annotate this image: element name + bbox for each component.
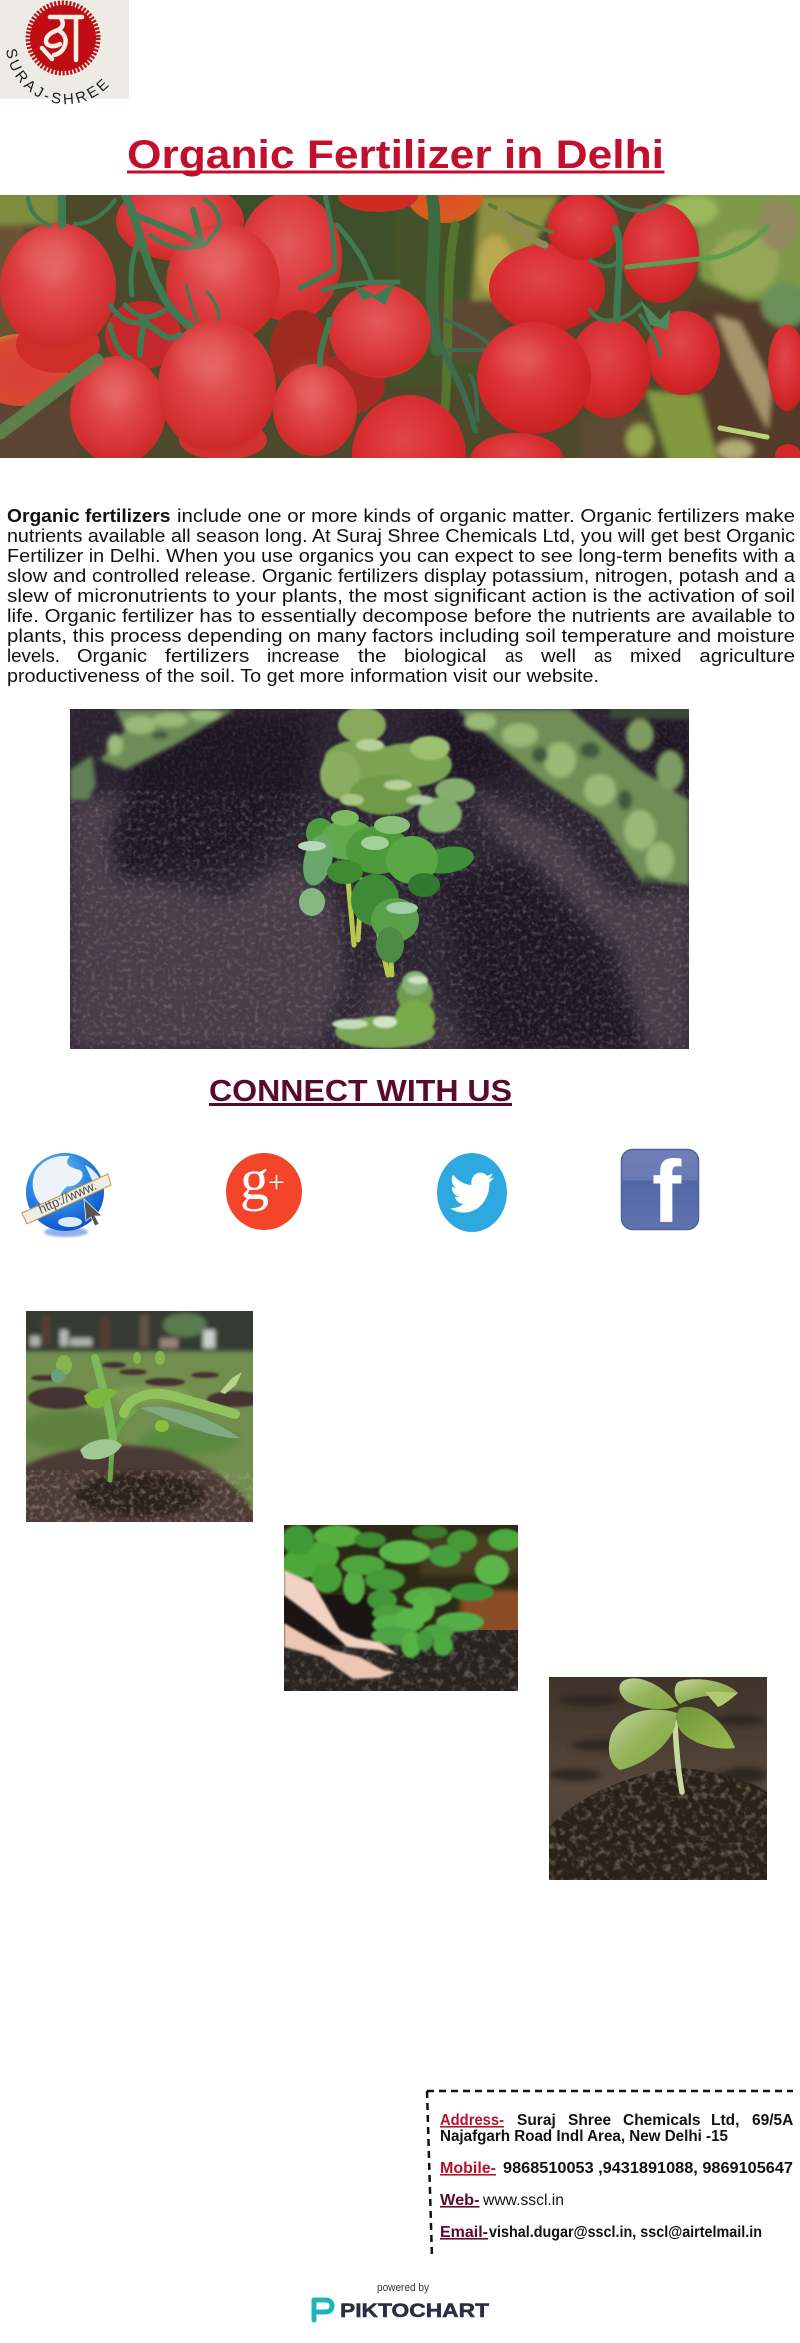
front tomatoes left group: [0, 223, 466, 458]
background rows: [70, 705, 695, 885]
intro paragraph: fertilizers: [165, 646, 250, 666]
photo: hands planting in soil: [277, 1525, 528, 1691]
intro paragraph: include one or more kinds of organic matter. Organic fertilizers make: [177, 506, 795, 526]
icon: google plus: +: [268, 1166, 285, 1199]
arms: [284, 1570, 398, 1679]
back seedlings: [51, 1351, 242, 1394]
icon: website globe: [22, 1153, 111, 1237]
intro paragraph: life. Organic fertilizer has to essentially decompose before the nutrients are available to: [7, 606, 795, 626]
icon: facebook: f: [652, 1142, 682, 1241]
highlights: [20, 230, 546, 407]
trees: [26, 1311, 253, 1354]
photo: seedling in soil mound: [549, 1677, 767, 1880]
banana plant: [95, 1358, 235, 1480]
icon: google plus: g: [240, 1147, 269, 1212]
intro paragraph: nutrients available all season long. At Suraj Shree Chemicals Ltd, you will get best Organic: [7, 526, 795, 546]
back plant in centre row: [320, 707, 475, 833]
mobile: 9868510053 ,9431891088, 9869105647: [503, 2160, 793, 2177]
grass: [20, 1385, 240, 1454]
intro paragraph: Organic: [77, 646, 147, 666]
email: Email-: [440, 2224, 488, 2241]
leaves: [277, 1525, 522, 1658]
heading: connect with us: CONNECT WITH US: [209, 1073, 512, 1108]
intro paragraph: biological: [404, 646, 486, 666]
intro paragraph: [7, 506, 796, 686]
intro paragraph: agriculture: [699, 646, 795, 666]
intro paragraph: plants, this process depending on many factors including soil temperature and moisture: [7, 626, 795, 646]
contact box dashed border: [427, 2091, 793, 2258]
mulch mounds: [28, 1362, 263, 1409]
intro paragraph: Organic fertilizers: [7, 506, 170, 526]
intro paragraph: as: [505, 646, 523, 666]
contact details: [440, 2112, 793, 2241]
icon: facebook: [622, 1142, 698, 1241]
address: Ltd,: [711, 2112, 739, 2129]
logo: Suraj Shree: [0, 0, 129, 104]
address: 69/5A: [752, 2112, 793, 2129]
footer: powered by piktochart: PIKTOCHART: [340, 2300, 489, 2322]
intro paragraph: slew of micronutrients to your plants, the most significant action is the activation of soil: [7, 586, 795, 606]
intro paragraph: well: [540, 646, 576, 666]
address: Shree: [568, 2112, 611, 2129]
web: Web-: [440, 2192, 480, 2209]
address: Address-: [440, 2112, 504, 2129]
icon: google plus: [226, 1147, 302, 1230]
intro paragraph: increase: [267, 646, 340, 666]
seedling: [609, 1678, 738, 1792]
intro paragraph: the: [358, 646, 387, 666]
footer: powered by piktochart: powered by: [377, 2282, 429, 2294]
tomatoes behind: [0, 195, 800, 458]
footer: powered by piktochart: [314, 2282, 489, 2322]
photo: young banana plant on mulch: [26, 1311, 253, 1522]
intro paragraph: mixed: [630, 646, 682, 666]
photo: ripe tomatoes on the vine: [0, 195, 800, 458]
intro paragraph: as: [594, 646, 612, 666]
icon: twitter: [437, 1153, 507, 1232]
logo: Suraj Shree: SURAJ-SHREE: [6, 49, 109, 104]
web: [440, 2192, 564, 2209]
sunlit soil: [70, 790, 689, 1049]
right front tomatoes: [470, 311, 720, 458]
mobile: Mobile-: [440, 2160, 496, 2177]
photo: rows of seedlings in dark soil: [70, 705, 695, 1049]
central plant: [298, 810, 476, 1048]
intro paragraph: productiveness of the soil. To get more information visit our website.: [7, 666, 599, 686]
stems behind: [430, 195, 552, 430]
icon: website globe: http://www.: [36, 1178, 99, 1217]
title: Organic Fertilizer in Delhi: [127, 133, 664, 177]
intro paragraph: levels.: [7, 646, 60, 666]
address: Chemicals: [623, 2112, 701, 2129]
address: Suraj: [517, 2112, 556, 2129]
web: www.sscl.in: [482, 2192, 564, 2209]
address: Najafgarh Road Indl Area, New Delhi -15: [440, 2128, 728, 2145]
address: [440, 2112, 793, 2145]
intro paragraph: Fertilizer in Delhi. When you use organics you can expect to see long-term benefits with a: [7, 546, 796, 566]
email: vishal.dugar@sscl.in, sscl@airtelmail.in: [489, 2224, 762, 2241]
intro paragraph: slow and controlled release. Organic fertilizers display potassium, nitrogen, potash and a: [7, 566, 796, 586]
green vines and calyxes: [0, 195, 767, 437]
